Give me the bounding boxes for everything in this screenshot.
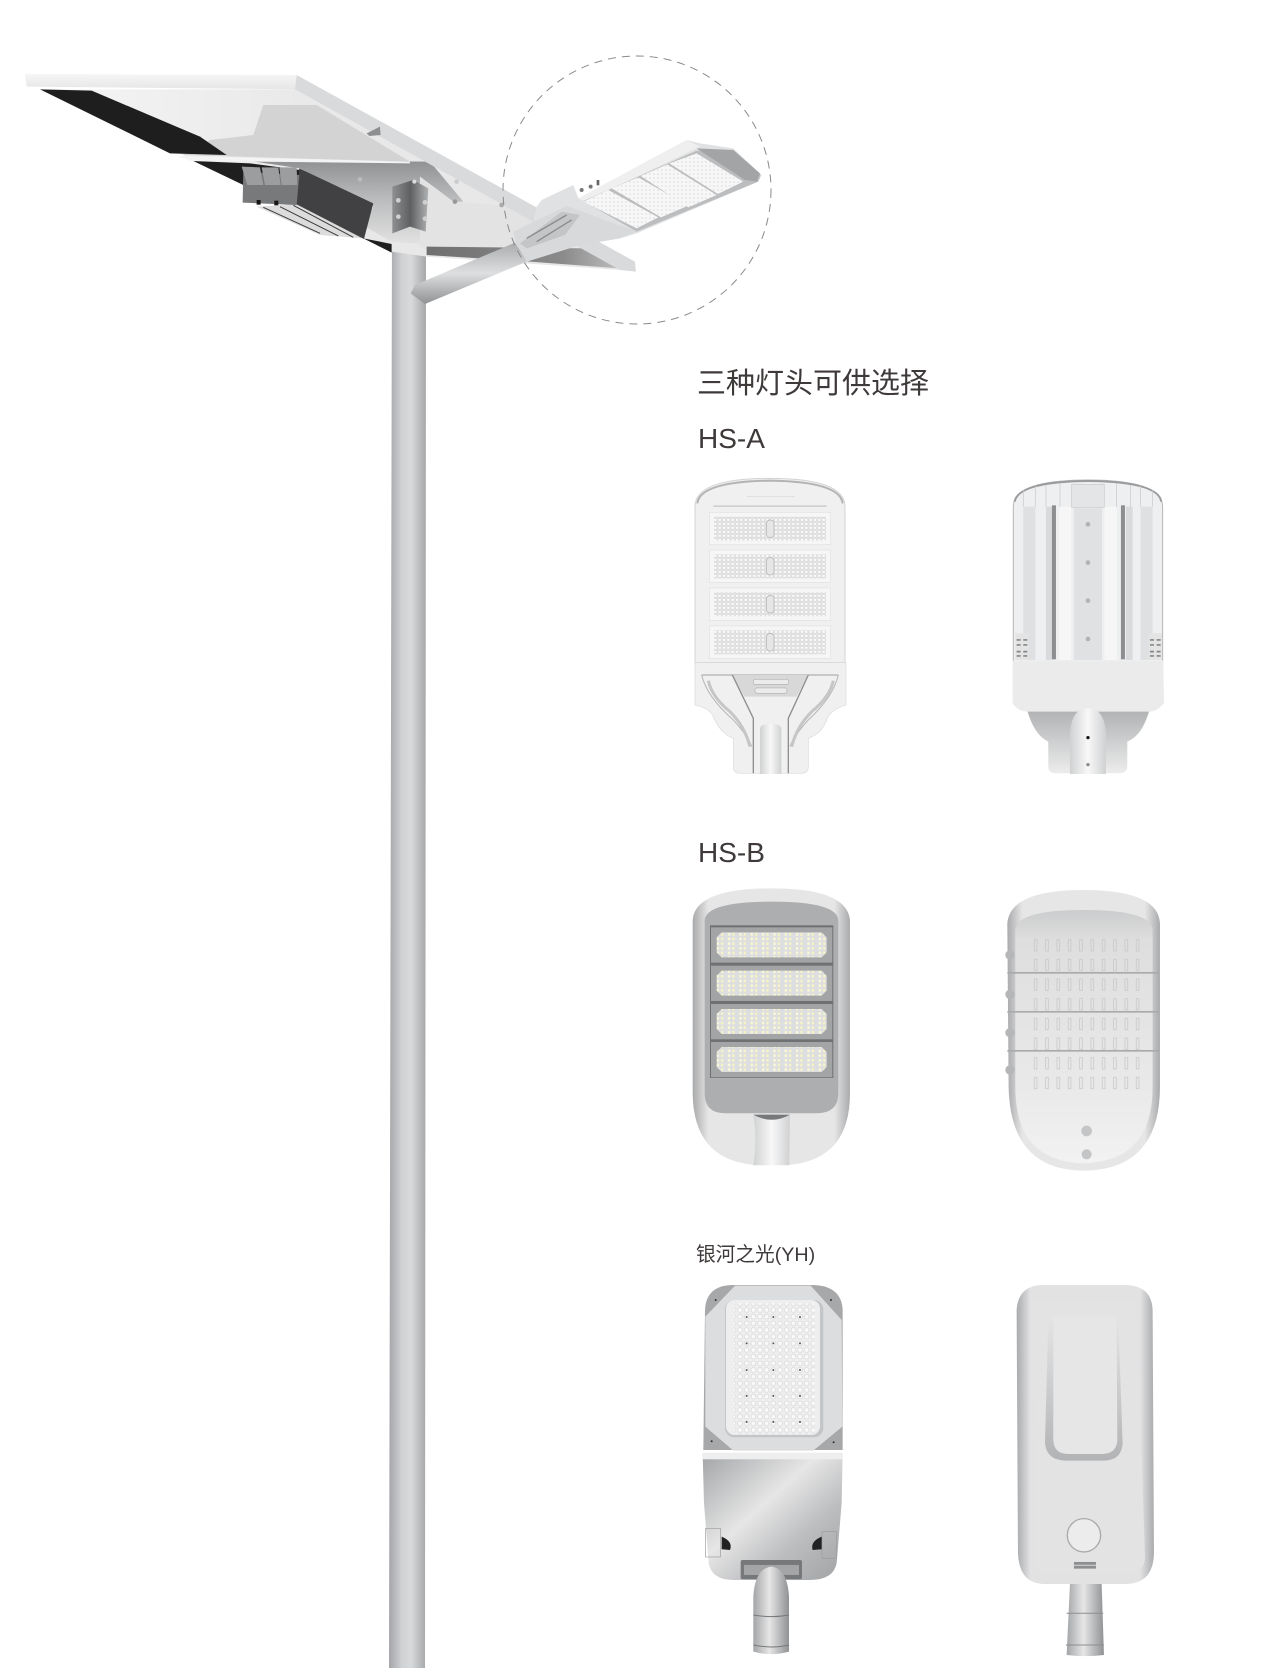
- dashed highlight circle: [503, 56, 771, 324]
- lamp arm: [411, 243, 527, 304]
- lamp: HS-B back view: [1005, 890, 1160, 1171]
- lamp: HS-B front view: [693, 888, 850, 1165]
- pole top bracket with bolts: [392, 180, 428, 233]
- solar panel: [25, 74, 636, 272]
- lamp: YH front view: [703, 1285, 843, 1654]
- title: 三种灯头可供选择: [697, 367, 929, 400]
- lamp: HS-A back view: [1013, 480, 1164, 774]
- lamp pole: [389, 225, 426, 1668]
- solar street light illustration: [25, 56, 771, 1668]
- label: HS-A: HS-A: [698, 423, 765, 454]
- label: HS-B: HS-B: [698, 837, 765, 868]
- lamp head on arm: [513, 140, 762, 262]
- battery and controller box: [242, 167, 373, 239]
- label: 银河之光(YH): 银河之光(YH): [696, 1244, 815, 1266]
- lamp: YH back view: [1017, 1285, 1154, 1656]
- lamp: HS-A front view: [695, 478, 846, 774]
